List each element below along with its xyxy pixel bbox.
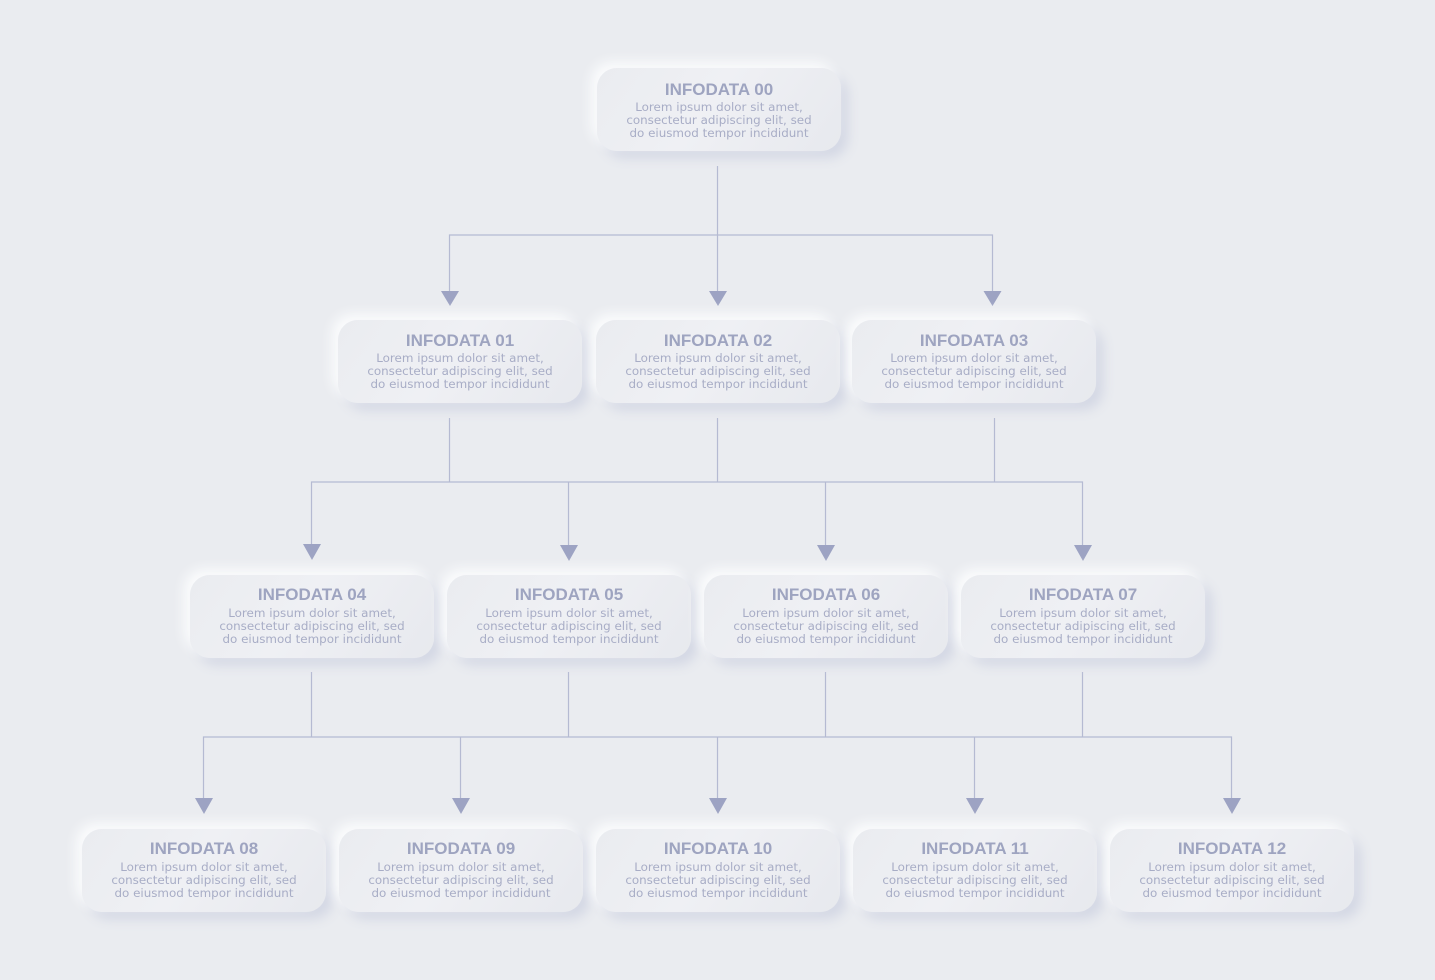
card: infodata 03: consectetur adipiscing elit, sed [881, 364, 1067, 378]
card: infodata 01: Lorem ipsum dolor sit amet, [376, 351, 544, 365]
card: infodata 03: INFODATA 03 [920, 331, 1028, 350]
card: infodata 02: INFODATA 02 [664, 331, 772, 350]
card: infodata 12 [1110, 829, 1354, 912]
card: infodata 02: Lorem ipsum dolor sit amet, [634, 351, 802, 365]
card: infodata 05: Lorem ipsum dolor sit amet, [485, 606, 653, 620]
card: infodata 00 [597, 68, 841, 151]
card: infodata 09: do eiusmod tempor incididunt [371, 886, 550, 900]
card: infodata 07: INFODATA 07 [1029, 585, 1137, 604]
card: infodata 01: consectetur adipiscing elit, sed [367, 364, 553, 378]
card: infodata 10: INFODATA 10 [664, 839, 772, 858]
card: infodata 11 [853, 829, 1097, 912]
card: infodata 06: Lorem ipsum dolor sit amet, [742, 606, 910, 620]
card: infodata 03 [852, 320, 1096, 403]
card: infodata 08: Lorem ipsum dolor sit amet, [120, 860, 288, 874]
connectors: level 0 to level 1 [450, 166, 992, 293]
card: infodata 10: do eiusmod tempor incididunt [628, 886, 808, 900]
card: infodata 11: do eiusmod tempor incididunt [885, 886, 1064, 900]
card: infodata 06: do eiusmod tempor incididunt [736, 632, 916, 646]
card: infodata 04: do eiusmod tempor incididunt [222, 632, 402, 646]
card: infodata 05: do eiusmod tempor incididunt [479, 632, 658, 646]
card: infodata 08: consectetur adipiscing elit, sed [111, 873, 297, 887]
card: infodata 10: consectetur adipiscing elit, sed [625, 873, 811, 887]
card: infodata 05: consectetur adipiscing elit, sed [476, 619, 662, 633]
card: infodata 03: Lorem ipsum dolor sit amet, [890, 351, 1058, 365]
card: infodata 04: Lorem ipsum dolor sit amet, [228, 606, 396, 620]
connectors: level 1 to level 2 [312, 418, 1082, 546]
card: infodata 00: consectetur adipiscing elit, sed [626, 113, 812, 127]
card: infodata 00: Lorem ipsum dolor sit amet, [635, 100, 803, 114]
card: infodata 08: INFODATA 08 [150, 839, 258, 858]
arrows: level 3 [195, 798, 1241, 814]
card: infodata 01 [338, 320, 582, 403]
card: infodata 07: consectetur adipiscing elit, sed [990, 619, 1176, 633]
card: infodata 00: INFODATA 00 [665, 80, 773, 99]
card: infodata 07: do eiusmod tempor incididunt [993, 632, 1172, 646]
card: infodata 08: do eiusmod tempor incididunt [114, 886, 294, 900]
arrows: level 1 [441, 291, 1002, 306]
card: infodata 02 [596, 320, 840, 403]
card: infodata 11: INFODATA 11 [921, 839, 1029, 858]
card: infodata 02: do eiusmod tempor incididunt [628, 377, 808, 391]
card: infodata 03: do eiusmod tempor incididunt [884, 377, 1064, 391]
card: infodata 06: consectetur adipiscing elit, sed [733, 619, 919, 633]
card: infodata 09: consectetur adipiscing elit, sed [368, 873, 554, 887]
card: infodata 09: Lorem ipsum dolor sit amet, [377, 860, 545, 874]
connectors: level 2 to level 3 [204, 672, 1232, 800]
card: infodata 05 [447, 575, 691, 658]
card: infodata 00: do eiusmod tempor incididunt [629, 126, 808, 140]
card: infodata 09: INFODATA 09 [407, 839, 515, 858]
card: infodata 10 [596, 829, 840, 912]
card: infodata 01: INFODATA 01 [406, 331, 514, 350]
card: infodata 06: INFODATA 06 [772, 585, 880, 604]
card: infodata 09 [339, 829, 583, 912]
card: infodata 12: do eiusmod tempor incididunt [1142, 886, 1322, 900]
card: infodata 04 [190, 575, 434, 658]
card: infodata 04: INFODATA 04 [258, 585, 366, 604]
card: infodata 05: INFODATA 05 [515, 585, 623, 604]
card: infodata 07 [961, 575, 1205, 658]
card: infodata 10: Lorem ipsum dolor sit amet, [634, 860, 802, 874]
card: infodata 12: consectetur adipiscing elit, sed [1139, 873, 1325, 887]
card: infodata 06 [704, 575, 948, 658]
card: infodata 08 [82, 829, 326, 912]
card: infodata 01: do eiusmod tempor incididunt [370, 377, 550, 391]
card: infodata 02: consectetur adipiscing elit, sed [625, 364, 811, 378]
card: infodata 04: consectetur adipiscing elit, sed [219, 619, 405, 633]
card: infodata 11: consectetur adipiscing elit, sed [882, 873, 1068, 887]
card: infodata 07: Lorem ipsum dolor sit amet, [999, 606, 1167, 620]
arrows: level 2 [303, 544, 1092, 561]
card: infodata 12: Lorem ipsum dolor sit amet, [1148, 860, 1316, 874]
card: infodata 12: INFODATA 12 [1178, 839, 1286, 858]
card: infodata 11: Lorem ipsum dolor sit amet, [891, 860, 1059, 874]
